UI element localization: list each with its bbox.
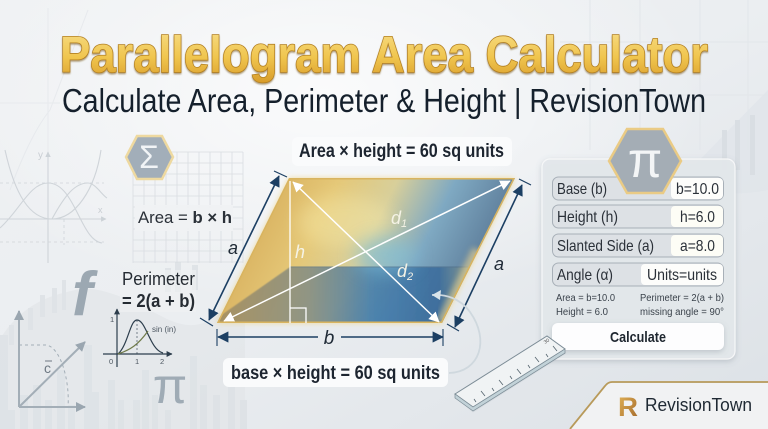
row: height: h=6.0 bbox=[680, 209, 715, 226]
calculate button bbox=[552, 323, 724, 350]
grid behind area formula bbox=[133, 152, 243, 263]
parallelogram fill bbox=[210, 178, 515, 323]
icon: pi hexagon bbox=[609, 129, 681, 193]
row: slanted side bbox=[552, 234, 724, 257]
panel: calculator bbox=[542, 159, 735, 359]
bottom base label bbox=[223, 358, 448, 387]
results text: Height = 6.0 bbox=[556, 307, 608, 318]
results text: Area = b=10.0 bbox=[556, 293, 615, 304]
background bar chart bbox=[0, 262, 247, 429]
diagram letters bbox=[295, 208, 413, 283]
small sine chart: sin (in) bbox=[152, 325, 176, 334]
icon: vector diagram: c bbox=[44, 360, 51, 376]
row: height: Height (h) bbox=[557, 209, 618, 226]
perimeter formula bbox=[120, 269, 196, 312]
row: angle bbox=[552, 263, 724, 286]
ruler bbox=[455, 336, 566, 412]
row: base bbox=[552, 177, 724, 200]
title: Parallelogram Area Calculator bbox=[60, 26, 708, 83]
row: angle: Angle (α) bbox=[557, 267, 613, 284]
perimeter formula: = 2(a + b) bbox=[122, 291, 195, 311]
dimension a right bbox=[447, 179, 531, 331]
row: slanted side: a=8.0 bbox=[680, 238, 715, 255]
row: slanted side: Slanted Side (a) bbox=[557, 238, 654, 255]
small sine chart: 0 bbox=[109, 357, 113, 366]
ruler: 30 bbox=[543, 338, 551, 346]
top area label bbox=[292, 137, 512, 166]
parallelogram glow bbox=[217, 178, 515, 323]
left background graph bbox=[0, 150, 107, 263]
icon: sigma hexagon: Σ bbox=[139, 139, 159, 175]
diagonal d2 bbox=[293, 182, 439, 322]
icon: pi hexagon: π bbox=[628, 132, 662, 188]
diagram letters: 2 bbox=[406, 271, 413, 283]
curved arrow bbox=[432, 290, 480, 373]
parallelogram diagram bbox=[210, 178, 515, 323]
dimension a left bbox=[200, 171, 287, 326]
row: height bbox=[552, 205, 724, 228]
height line bbox=[290, 181, 306, 323]
logo: R bbox=[618, 392, 638, 422]
dimension b: b bbox=[324, 328, 334, 349]
bottom base label: base × height = 60 sq units bbox=[231, 363, 440, 384]
dimension a right: a bbox=[494, 254, 504, 274]
row: angle: Units=units bbox=[647, 267, 717, 284]
row: base: b=10.0 bbox=[676, 181, 719, 198]
diagram letters: d bbox=[391, 208, 401, 228]
left background graph: y bbox=[38, 150, 43, 161]
small sine chart bbox=[103, 309, 176, 367]
icon: integral f: f bbox=[72, 260, 98, 329]
icon: sigma hexagon bbox=[126, 136, 173, 179]
diagram letters: 1 bbox=[401, 218, 407, 230]
top area label: Area × height = 60 sq units bbox=[299, 141, 504, 162]
diagonal d1 bbox=[224, 181, 510, 321]
results text bbox=[556, 293, 724, 318]
left background graph: x bbox=[98, 205, 103, 215]
dimension a left: a bbox=[228, 238, 238, 258]
results text: Perimeter = 2(a + b) bbox=[640, 293, 724, 304]
results text: missing angle = 90° bbox=[640, 307, 724, 318]
small sine chart: 1 bbox=[135, 357, 139, 366]
logo: RevisionTown bbox=[645, 395, 752, 415]
diagram letters: h bbox=[295, 242, 305, 262]
small sine chart: 1 bbox=[110, 315, 114, 324]
icon: pi small: π bbox=[153, 358, 187, 414]
logo bbox=[570, 382, 768, 429]
small sine chart: 2 bbox=[160, 357, 164, 366]
row: base: Base (b) bbox=[557, 181, 607, 198]
diagram letters: d bbox=[397, 261, 407, 281]
calculate button: Calculate bbox=[610, 329, 666, 346]
area formula: Area = b × h bbox=[138, 208, 232, 227]
dimension b bbox=[217, 328, 443, 349]
icon: vector diagram bbox=[19, 311, 85, 407]
perimeter formula: Perimeter bbox=[122, 269, 195, 289]
